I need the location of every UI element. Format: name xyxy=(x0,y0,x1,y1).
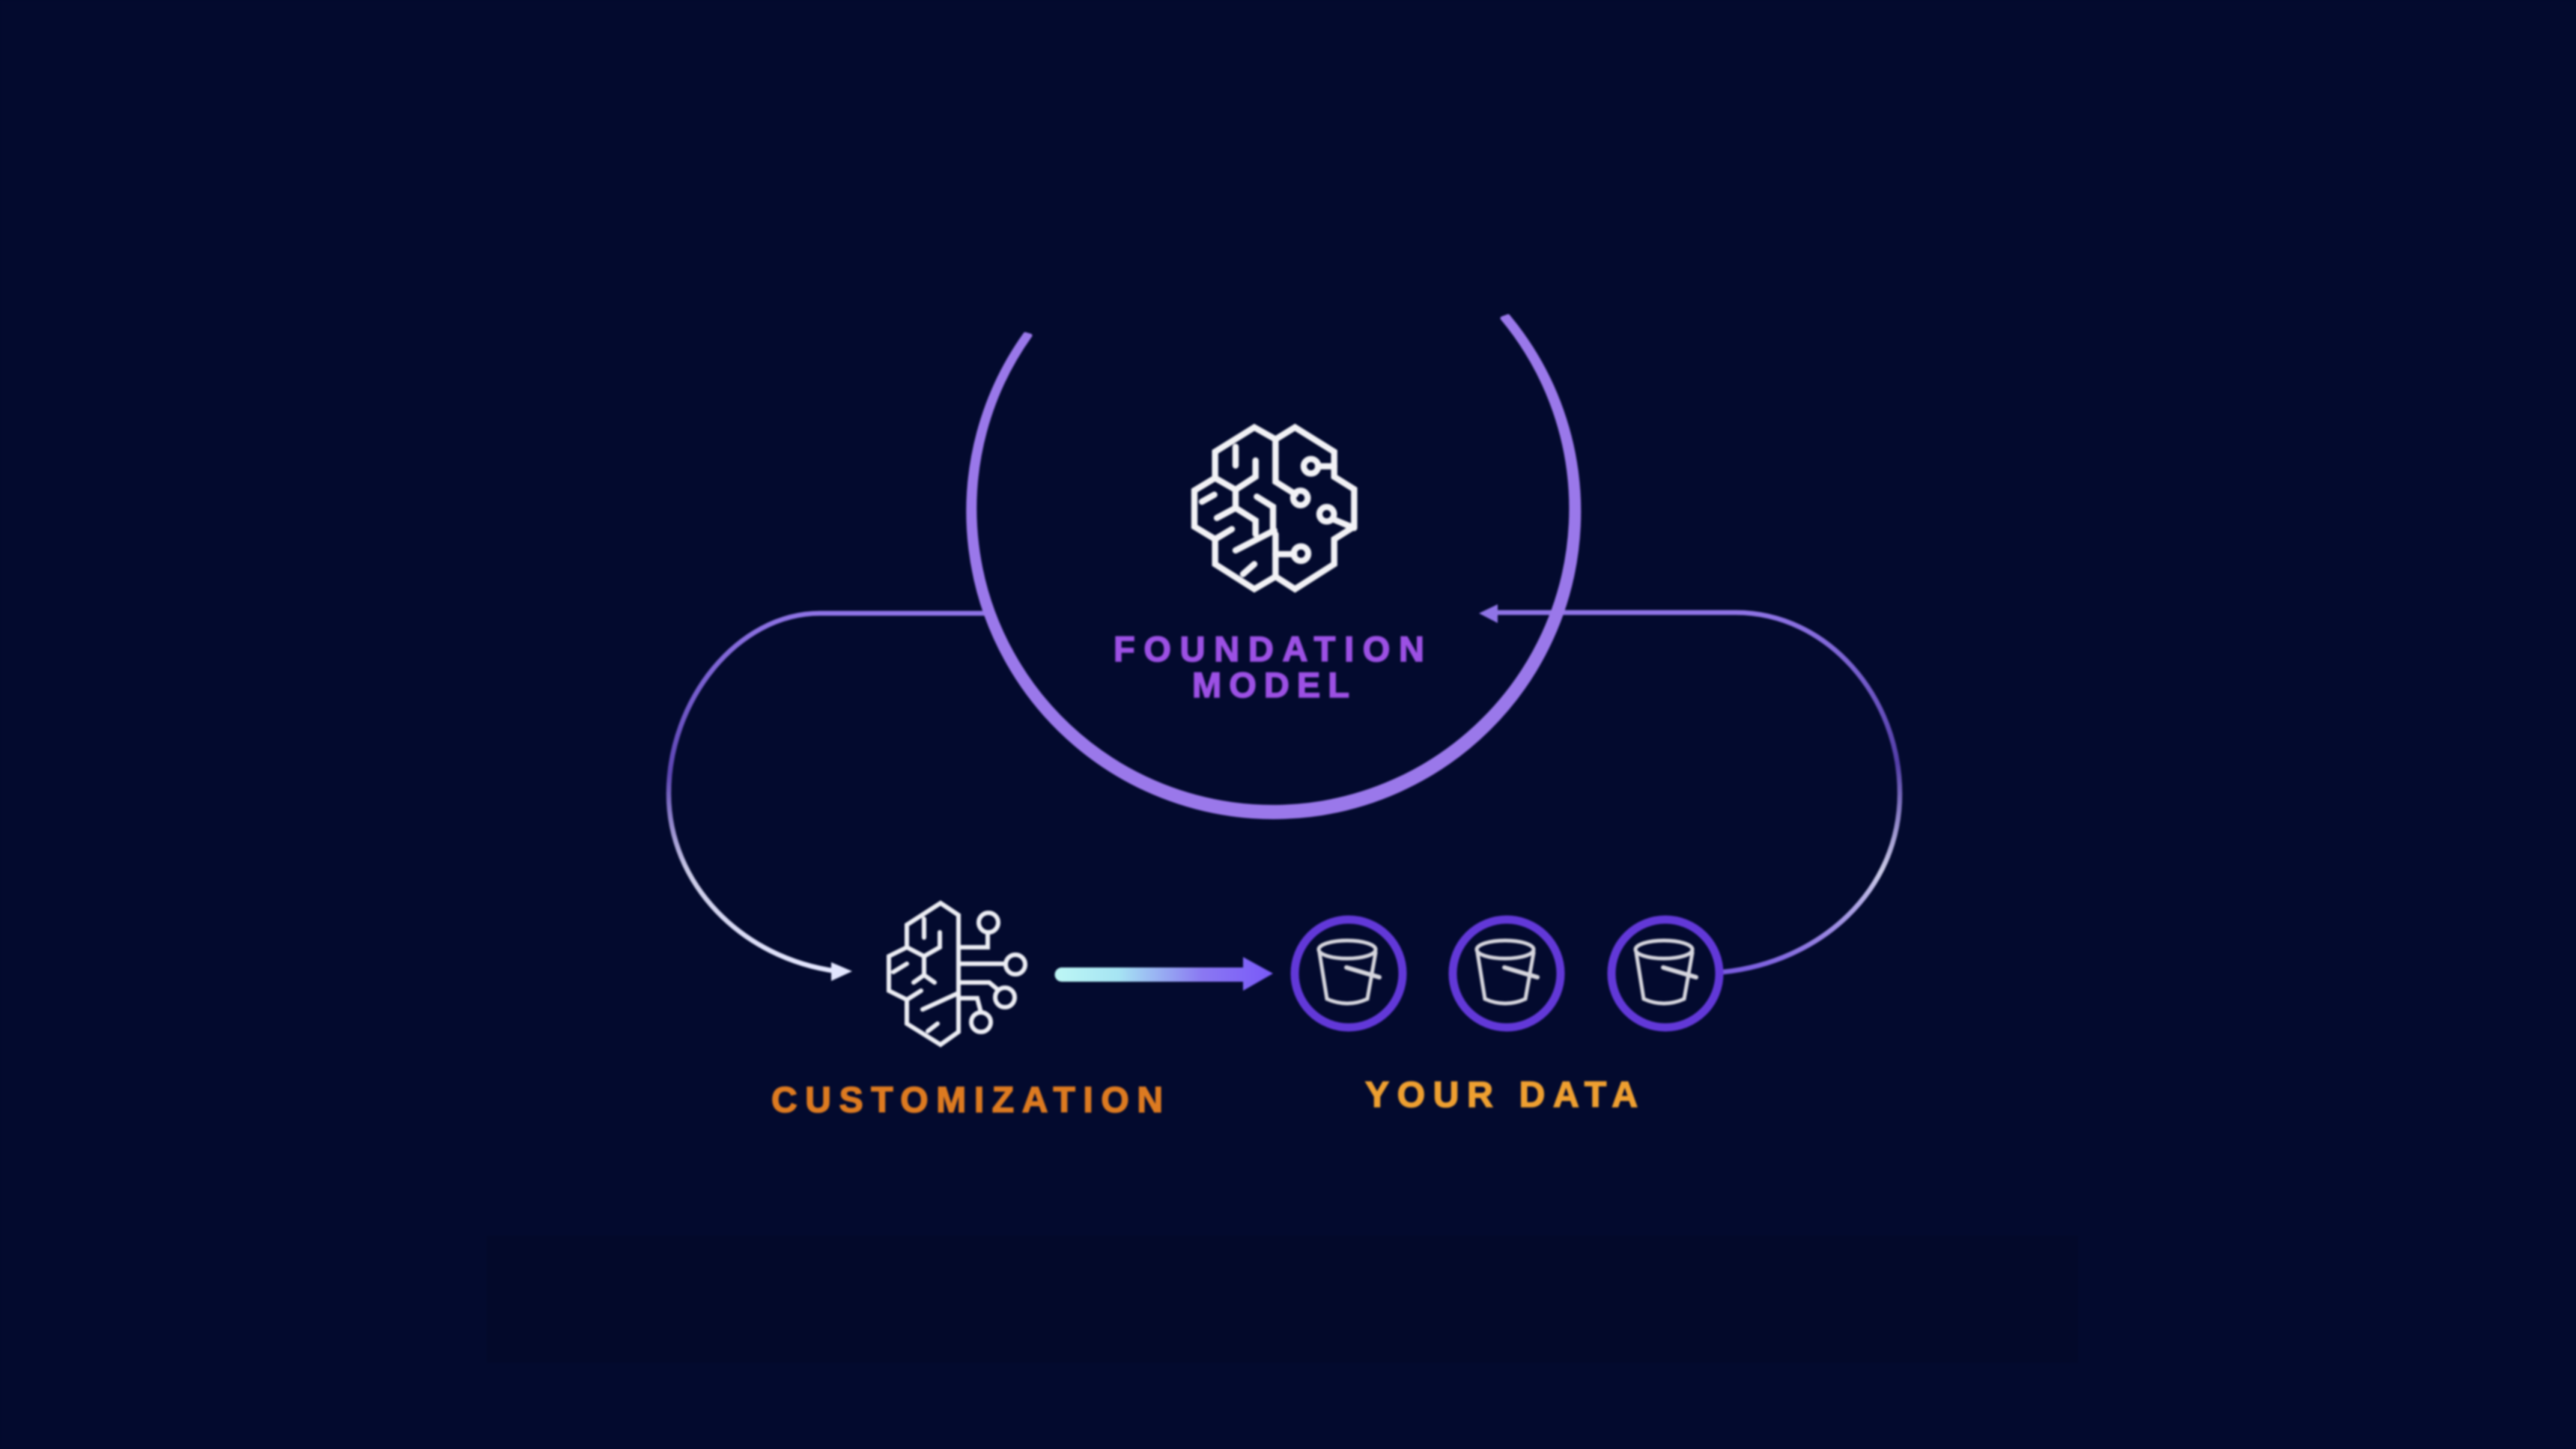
arrow: customization to your data xyxy=(1054,957,1273,991)
icon: data bucket 3 xyxy=(1611,920,1719,1027)
arrow: your data to foundation model xyxy=(1479,604,1900,972)
arrow: foundation model to customization xyxy=(669,613,987,981)
icon: customization brain xyxy=(889,903,1025,1045)
foundation model ring xyxy=(968,316,1579,817)
label: foundation model xyxy=(1114,629,1424,705)
icon: data bucket 1 xyxy=(1295,920,1403,1027)
faint lower band xyxy=(487,1236,2078,1363)
icon: data bucket 2 xyxy=(1453,920,1561,1027)
label: foundation model: FOUNDATION xyxy=(1114,629,1424,669)
icon: foundation model brain xyxy=(1194,428,1354,589)
label: customization: CUSTOMIZATION xyxy=(771,1081,1163,1120)
label: your data: YOUR DATA xyxy=(1365,1075,1638,1115)
label: foundation model: MODEL xyxy=(1192,665,1349,705)
